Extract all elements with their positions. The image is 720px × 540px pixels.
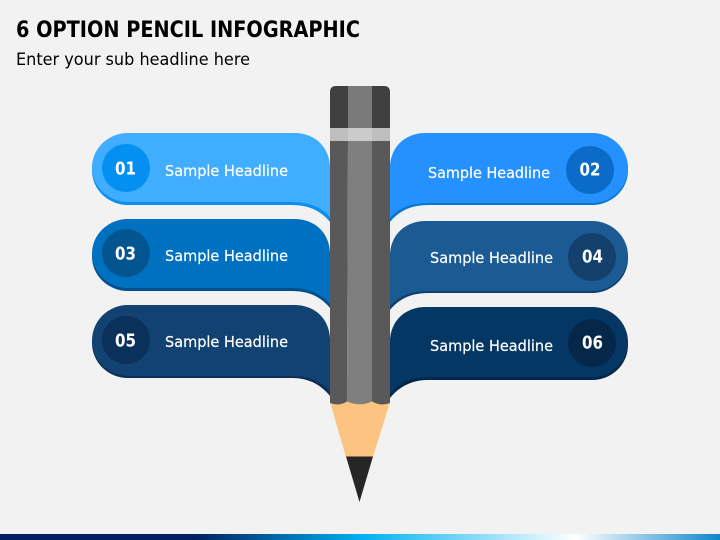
headline 03: Sample Headline xyxy=(165,247,288,265)
icon: number 02: 02 xyxy=(580,160,600,180)
headline 05: Sample Headline xyxy=(165,333,288,351)
pencil eraser cap xyxy=(330,86,390,128)
headline 04: Sample Headline xyxy=(430,249,553,267)
headline 02: Sample Headline xyxy=(428,164,550,182)
title: 6 OPTION PENCIL INFOGRAPHIC xyxy=(16,17,360,43)
icon: number 04: 04 xyxy=(582,248,603,268)
panel: option 02 xyxy=(390,133,628,222)
pencil lead xyxy=(346,456,373,502)
footer gradient bar xyxy=(0,534,720,540)
icon: number 01 xyxy=(102,144,150,192)
icon: number 04 xyxy=(568,233,616,281)
icon: number 06 xyxy=(568,319,616,367)
icon: number 06: 06 xyxy=(582,334,603,354)
icon: pencil xyxy=(330,86,390,502)
headline 01: Sample Headline xyxy=(165,162,288,180)
panel: option 04 xyxy=(390,221,628,310)
panel: option 05 xyxy=(92,305,330,396)
pencil body xyxy=(330,141,390,404)
subtitle: Enter your sub headline here xyxy=(16,50,250,69)
pencil wood tip xyxy=(330,402,390,457)
panel: option 01 xyxy=(92,133,330,222)
icon: number 05 xyxy=(102,316,150,364)
panel: option 03 xyxy=(92,219,330,308)
icon: number 05: 05 xyxy=(115,332,136,352)
icon: number 03: 03 xyxy=(115,244,136,264)
icon: number 03 xyxy=(102,229,150,277)
pencil ferrule band xyxy=(330,128,390,141)
icon: number 02 xyxy=(566,146,614,194)
icon: number 01: 01 xyxy=(115,160,136,180)
panel: option 06 xyxy=(390,307,628,398)
headline 06: Sample Headline xyxy=(430,337,553,355)
